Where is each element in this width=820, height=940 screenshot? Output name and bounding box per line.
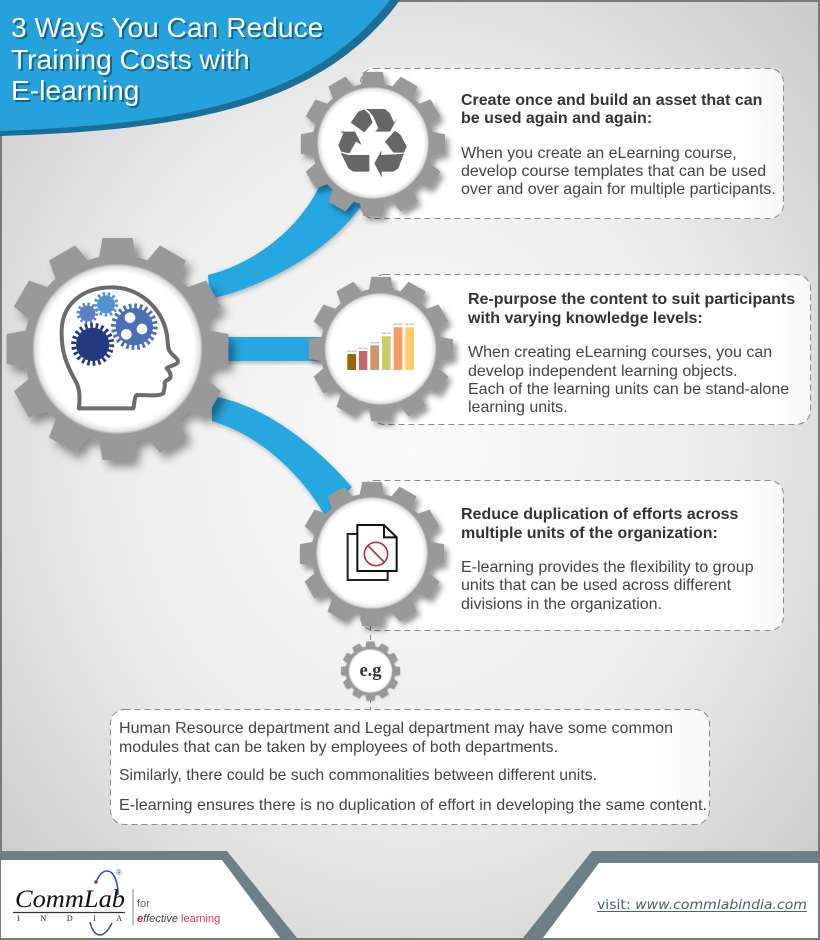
gear: documents xyxy=(300,482,444,626)
logo: CommLab India: for xyxy=(137,898,150,910)
title: E-learning xyxy=(13,76,141,108)
example text: E-learning ensures there is no duplication of effort in developing the same content. xyxy=(119,797,707,814)
icon: recycle xyxy=(338,109,407,177)
panel 2 body: develop independent learning objects. xyxy=(468,363,738,380)
icon: bar chart: sample xyxy=(358,346,368,350)
logo: CommLab India: effective learning xyxy=(137,913,220,925)
website link: visit: www.commlabindia.com xyxy=(597,898,807,913)
dashed link to example xyxy=(370,626,372,710)
icon: bar chart: sample xyxy=(347,349,357,353)
title xyxy=(11,11,325,108)
panel 1 body: When you create an eLearning course, xyxy=(461,145,737,162)
example text xyxy=(119,720,707,814)
panel 3 heading: Reduce duplication of efforts across xyxy=(461,506,738,523)
panel 1 heading xyxy=(461,92,762,127)
icon: bar chart: sample xyxy=(405,322,415,326)
panel 2 body: Each of the learning units can be stand-alone xyxy=(468,381,789,398)
panel 1 body: over and over again for multiple participants. xyxy=(461,181,776,198)
icon: bar chart: sample xyxy=(370,340,380,344)
panel 2 heading: with varying knowledge levels: xyxy=(467,310,703,327)
panel 2 body: When creating eLearning courses, you can xyxy=(468,344,772,361)
panel 3 heading xyxy=(461,506,738,542)
icon: bar chart: sample xyxy=(382,331,391,335)
gear: e.g xyxy=(341,642,400,700)
title: 3 Ways You Can Reduce xyxy=(13,13,325,45)
icon: bar chart xyxy=(347,322,415,370)
logo: CommLab India xyxy=(13,868,220,935)
title: 3 Ways You Can Reduce xyxy=(11,11,323,43)
panel 2 heading xyxy=(467,291,795,327)
panel: create once xyxy=(360,68,784,218)
connector: brain gear to recycle gear xyxy=(208,180,362,299)
logo: CommLab India: ® xyxy=(116,868,122,877)
panel 1 body xyxy=(461,145,776,198)
title: E-learning xyxy=(11,74,139,106)
panel 2 body xyxy=(468,344,789,416)
footer right xyxy=(523,851,819,938)
panel 2 heading: Re-purpose the content to suit participants xyxy=(468,291,795,308)
title: Training Costs with xyxy=(11,43,250,75)
panel 3 body: units that can be used across different xyxy=(461,577,732,594)
header banner xyxy=(0,0,400,136)
gear: recycle xyxy=(301,72,445,216)
panel: re-purpose xyxy=(370,274,810,424)
footer left xyxy=(1,851,297,938)
panel 3 body: E-learning provides the flexibility to group xyxy=(461,559,754,576)
connector: brain gear to documents gear xyxy=(212,396,352,516)
connector: brain gear to chart gear xyxy=(222,337,322,361)
panel 2 body: learning units. xyxy=(468,399,568,416)
panel 3 body xyxy=(461,559,754,613)
panel: reduce duplication xyxy=(360,480,784,630)
logo: CommLab India: I N D I A xyxy=(17,914,122,923)
example text: modules that can be taken by employees of both departments. xyxy=(119,739,558,756)
panel 1 body: develop course templates that can be used xyxy=(461,163,766,180)
panel 1 heading: Create once and build an asset that can xyxy=(461,92,762,109)
panel 1 heading: be used again and again: xyxy=(461,110,652,127)
icon: bar chart: sample xyxy=(393,322,403,326)
icon: head with gears xyxy=(62,287,178,408)
gear: chart xyxy=(309,277,453,421)
icon: documents with prohibition sign xyxy=(348,525,397,580)
panel 3 heading: multiple units of the organization: xyxy=(461,525,718,542)
gear: brain xyxy=(7,238,228,460)
title: Training Costs with xyxy=(13,45,252,77)
example text: Similarly, there could be such commonalities between different units. xyxy=(119,767,597,784)
panel: example xyxy=(110,710,710,824)
example text: Human Resource department and Legal department may have some common xyxy=(119,720,673,737)
logo: CommLab India: CommLab xyxy=(15,886,125,913)
label e.g: e.g xyxy=(359,661,382,681)
panel 3 body: divisions in the organization. xyxy=(461,596,662,613)
